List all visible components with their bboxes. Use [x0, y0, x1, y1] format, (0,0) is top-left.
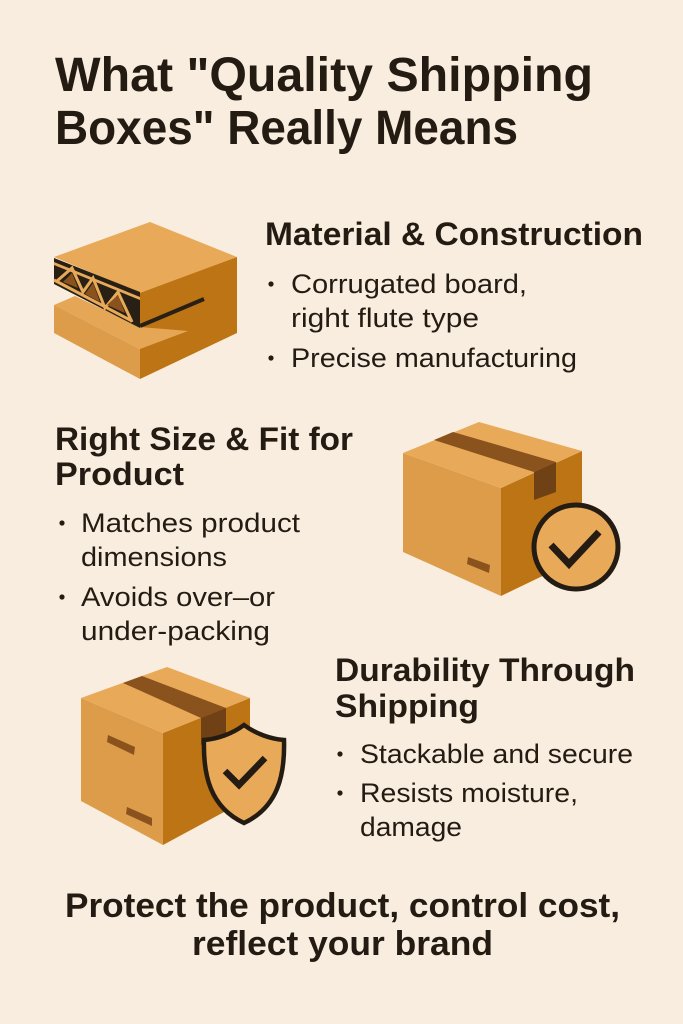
icon: box with check badge	[403, 422, 618, 596]
title: Boxes" Really Means	[55, 102, 518, 155]
bullet list: material: Corrugated board,	[291, 269, 527, 299]
bullet list: size and fit	[59, 508, 301, 646]
closing statement	[65, 887, 620, 963]
closing statement: reflect your brand	[192, 925, 493, 963]
heading: material and construction: Material & Construction	[265, 216, 643, 252]
heading: durability: Shipping	[335, 688, 479, 724]
heading: durability: Durability Through	[335, 652, 635, 688]
bullet list: durability: Stackable and secure	[360, 739, 633, 769]
bullet list: durability: damage	[360, 812, 462, 842]
heading: right size and fit: Product	[55, 456, 184, 492]
icon: corrugated board cross-section box	[54, 222, 237, 379]
heading: durability	[335, 652, 635, 724]
bullet list: size and fit: Avoids over–or	[81, 582, 275, 612]
title: What "Quality Shipping	[55, 49, 593, 102]
bullet list: size and fit: under-packing	[81, 616, 270, 646]
bullet list: material: right flute type	[291, 303, 479, 333]
bullet list: durability	[337, 739, 633, 842]
bullet list: size and fit: Matches product	[81, 508, 301, 538]
bullet list: size and fit: dimensions	[81, 542, 227, 572]
heading: right size and fit: Right Size & Fit for	[55, 421, 353, 457]
icon: box with shield	[81, 667, 284, 845]
bullet list: material	[268, 269, 577, 373]
title	[55, 49, 593, 155]
bullet list: durability: Resists moisture,	[360, 778, 578, 808]
bullet list: material: Precise manufacturing	[291, 343, 577, 373]
closing statement: Protect the product, control cost,	[65, 887, 620, 925]
heading: right size and fit	[55, 421, 353, 492]
